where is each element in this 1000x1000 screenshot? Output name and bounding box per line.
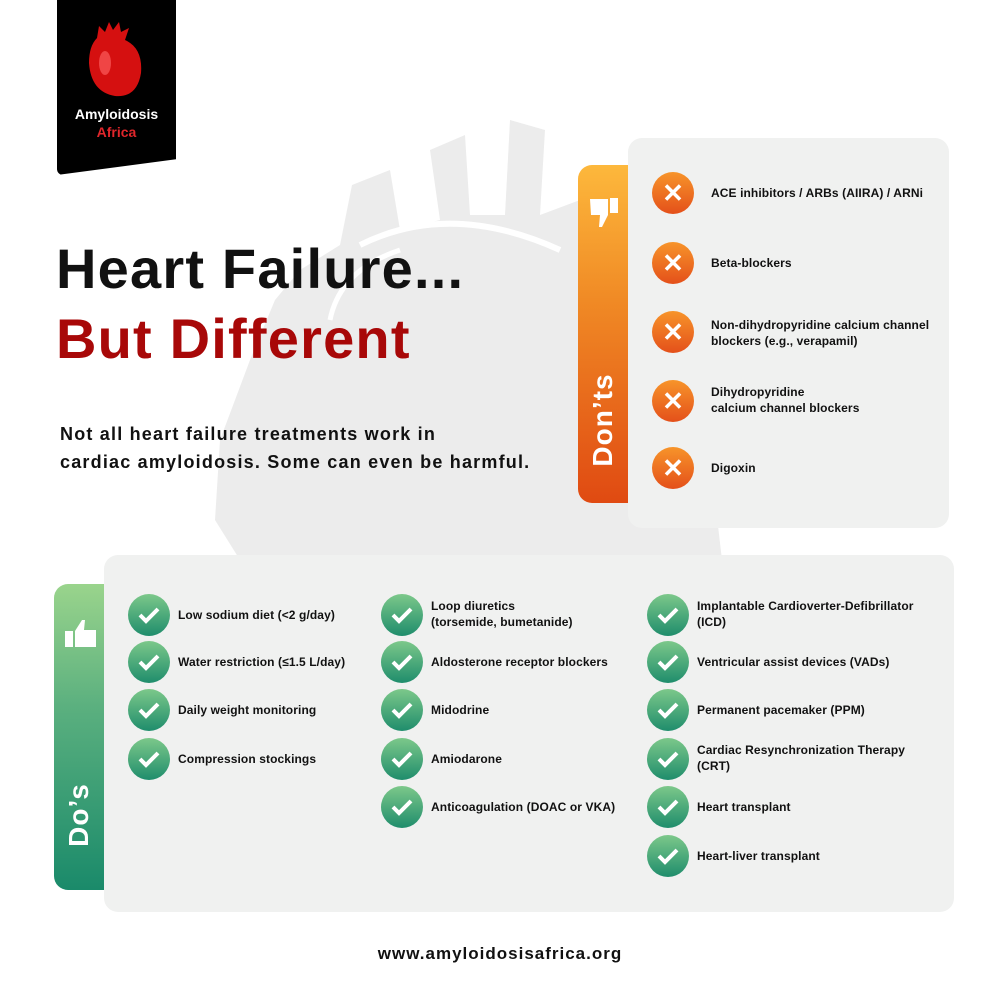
- panel: do's: (CRT): [697, 759, 730, 773]
- column 2: [381, 594, 423, 636]
- icon: thumbs down: [590, 198, 618, 227]
- column 1: [128, 594, 170, 636]
- panel: don'ts: ✕: [662, 317, 684, 347]
- panel: do's: Amiodarone: [431, 752, 502, 766]
- do's tab: Do’s: [63, 783, 94, 847]
- panel: do's: Heart transplant: [697, 800, 791, 814]
- logo badge: Amyloidosis: [75, 106, 158, 122]
- panel: do's: Aldosterone receptor blockers: [431, 655, 608, 669]
- panel: don'ts: Digoxin: [711, 461, 756, 475]
- panel: don'ts: Non-dihydropyridine calcium channel: [711, 318, 929, 332]
- panel: don'ts: ✕: [662, 248, 684, 278]
- panel: don'ts: blockers (e.g., verapamil): [711, 334, 858, 348]
- panel: do's: Ventricular assist devices (VADs): [697, 655, 890, 669]
- panel: don'ts: Beta-blockers: [711, 256, 792, 270]
- panel: don'ts: ✕: [662, 386, 684, 416]
- panel: do's: (ICD): [697, 615, 726, 629]
- panel: do's: Anticoagulation (DOAC or VKA): [431, 800, 615, 814]
- panel: don'ts: ✕: [662, 178, 684, 208]
- panel: do's: Cardiac Resynchronization Therapy: [697, 743, 905, 757]
- panel: don'ts: [578, 138, 949, 528]
- panel: do's: Loop diuretics: [431, 599, 515, 613]
- logo badge: Africa: [97, 124, 136, 140]
- panel: do's: (torsemide, bumetanide): [431, 615, 573, 629]
- panel: do's: Daily weight monitoring: [178, 703, 316, 717]
- panel: do's: Heart-liver transplant: [697, 849, 820, 863]
- icon: thumbs up: [65, 620, 96, 647]
- column 3: [647, 594, 689, 636]
- footer url: www.amyloidosisafrica.org: [378, 944, 622, 963]
- subtitle: Not all heart failure treatments work in: [60, 424, 436, 444]
- subtitle: [60, 424, 530, 472]
- don'ts tab: Don’ts: [587, 373, 618, 467]
- panel: don'ts: ACE inhibitors / ARBs (AIIRA) / ARNi: [711, 186, 923, 200]
- panel: do's: Midodrine: [431, 703, 489, 717]
- do's background card: [104, 555, 954, 912]
- do's tab: [54, 584, 104, 890]
- subtitle: cardiac amyloidosis. Some can even be harmful.: [60, 452, 530, 472]
- title: [56, 237, 464, 370]
- title: Heart Failure...: [56, 237, 464, 300]
- logo badge: [57, 0, 176, 175]
- panel: do's: Permanent pacemaker (PPM): [697, 703, 865, 717]
- panel: do's: Water restriction (≤1.5 L/day): [178, 655, 345, 669]
- panel: don'ts: calcium channel blockers: [711, 401, 859, 415]
- panel: do's: Compression stockings: [178, 752, 316, 766]
- don'ts background card: [628, 138, 949, 528]
- panel: do's: Low sodium diet (<2 g/day): [178, 608, 335, 622]
- panel: don'ts: ✕: [662, 453, 684, 483]
- title: But Different: [56, 307, 411, 370]
- panel: don'ts: Dihydropyridine: [711, 385, 805, 399]
- icon: red heart: [89, 22, 142, 96]
- don'ts tab: [578, 165, 628, 503]
- panel: do's: Implantable Cardioverter-Defibrillator: [697, 599, 914, 613]
- panel: do's: [54, 555, 954, 912]
